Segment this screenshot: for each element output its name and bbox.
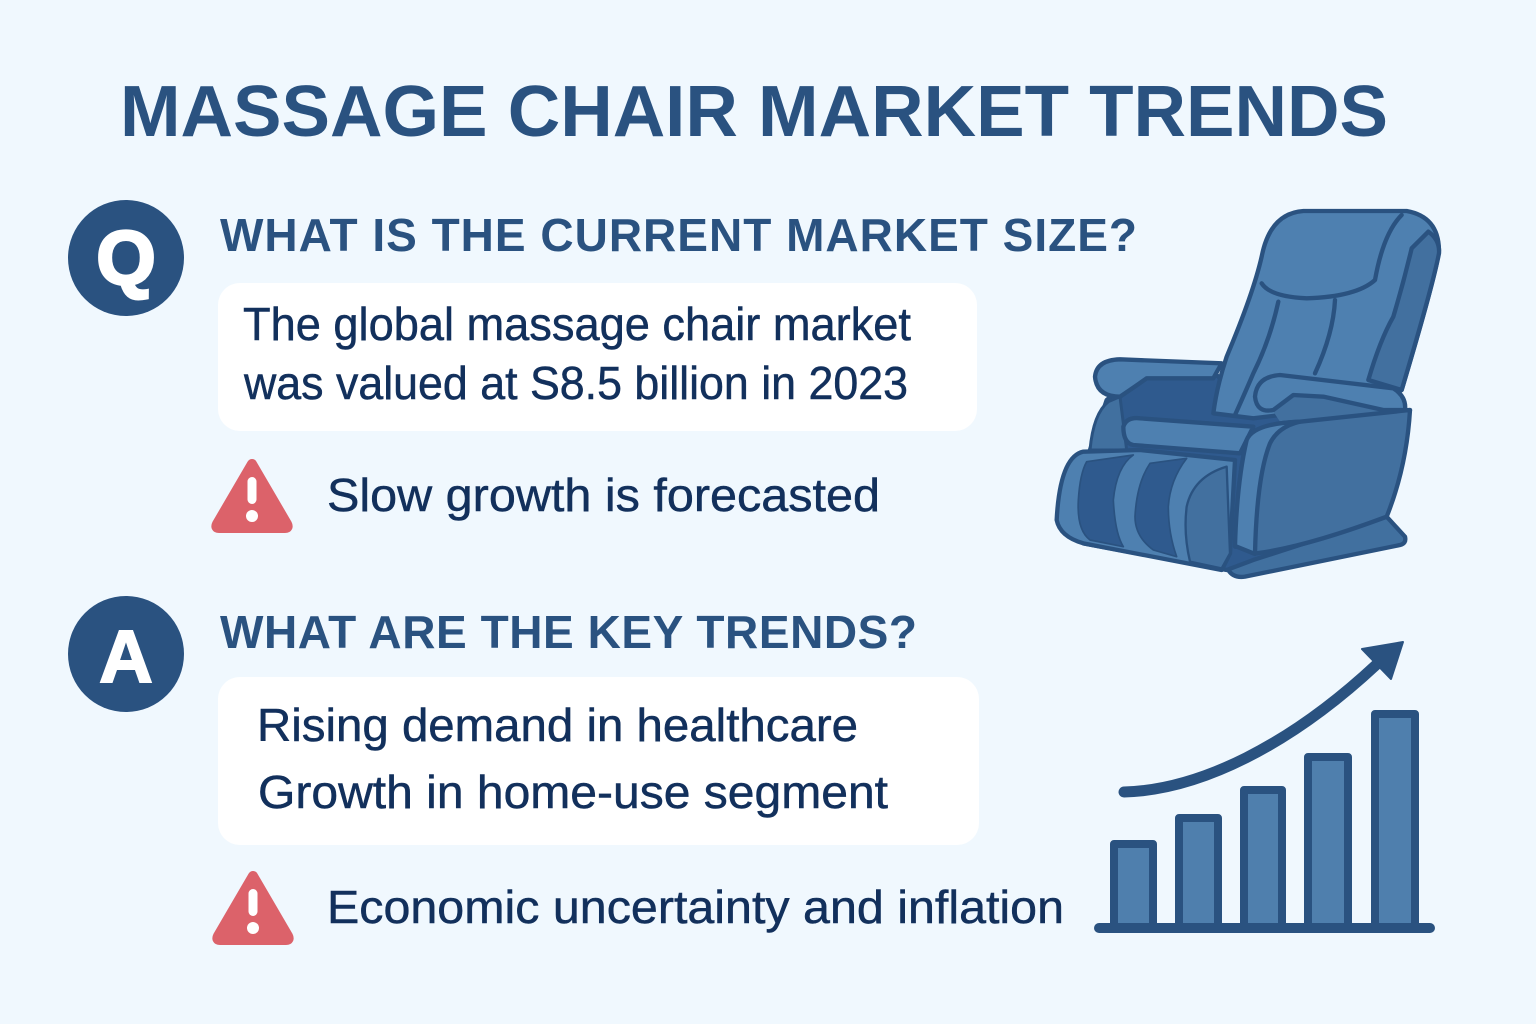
icon: Q badge [68, 200, 184, 316]
bar [1114, 844, 1153, 928]
chart: rising bars with arrow [1094, 642, 1435, 933]
heading: question: WHAT IS THE CURRENT MARKET SIZE? [220, 209, 1137, 261]
axis [1094, 923, 1435, 933]
panel: market size answer: was valued at S8.5 billion in 2023 [243, 357, 908, 409]
icon: warning triangle [216, 464, 288, 528]
bar [1244, 790, 1282, 928]
heading: answer: WHAT ARE THE KEY TRENDS? [220, 606, 917, 658]
text: risk one: Slow growth is forecasted [327, 469, 880, 521]
icon: A badge [68, 596, 184, 712]
bar [1375, 714, 1415, 928]
panel: key trends: Rising demand in healthcare [257, 699, 858, 751]
bar [1179, 818, 1218, 928]
arrow [1124, 642, 1403, 792]
title: MASSAGE CHAIR MARKET TRENDS [120, 72, 1388, 152]
icon: Q badge: Q [96, 216, 156, 301]
panel: key trends [218, 677, 979, 845]
panel: key trends: Growth in home-use segment [258, 766, 888, 818]
panel: market size answer: The global massage chair market [243, 298, 911, 350]
icon: massage chair [1057, 211, 1439, 577]
panel: market size answer [218, 283, 977, 431]
icon: warning triangle [217, 876, 289, 940]
text: risk two: Economic uncertainty and inflation [327, 881, 1064, 933]
icon: A badge: A [99, 615, 153, 698]
bar [1308, 757, 1348, 928]
